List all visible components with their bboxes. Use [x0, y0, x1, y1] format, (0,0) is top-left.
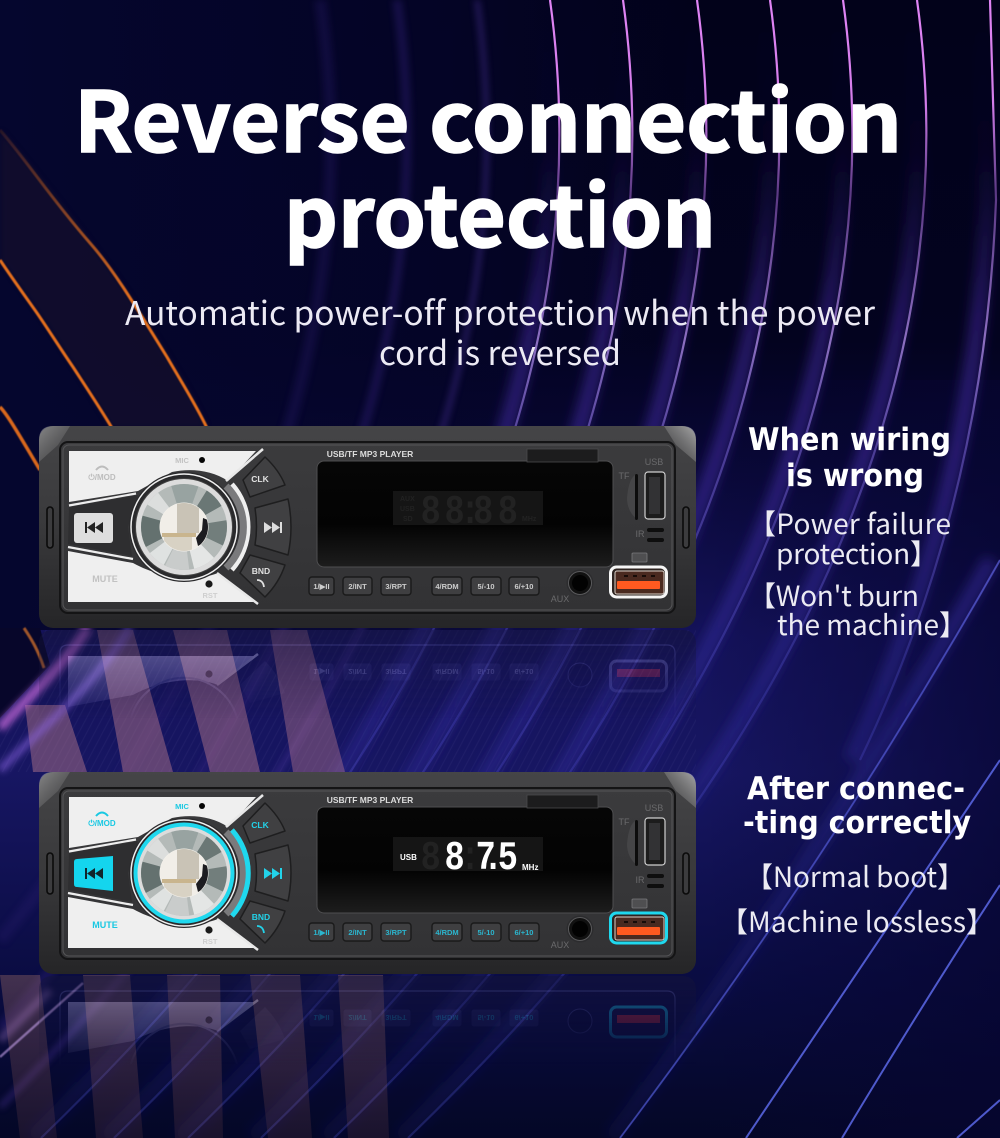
- preset buttons labels: [313, 582, 533, 591]
- panel labels: MUTE: [92, 574, 118, 584]
- label: after connecting correctly: [720, 771, 994, 941]
- reflection of radio, wrong wiring: 4/RDM: [435, 667, 459, 676]
- reflection of radio, correct wiring: 4/RDM: [435, 1013, 459, 1022]
- reflection of radio, correct wiring: 1/▶II: [313, 1013, 330, 1022]
- port labels: AUX: [551, 594, 569, 604]
- port labels: USB: [645, 803, 663, 813]
- subtitle: cord is reversed: [379, 327, 621, 375]
- panel labels lit: RST: [202, 937, 218, 946]
- blank LCD: 88:88: [421, 490, 518, 536]
- LCD reading 87.5 MHz: MHz: [522, 863, 538, 872]
- previous button: [74, 513, 113, 543]
- preset buttons labels: 2/INT: [348, 582, 367, 591]
- label: when wiring is wrong: is wrong: [786, 458, 924, 494]
- panel labels lit: MIC: [175, 802, 189, 811]
- preset buttons labels lit: 6/+10: [515, 928, 533, 937]
- cyan ring: [136, 824, 232, 922]
- next icon lit: [264, 868, 282, 879]
- reflection of radio, correct wiring: 3/RPT: [385, 1013, 407, 1022]
- reflection of radio, correct wiring: [39, 976, 696, 1054]
- car radio, correct wiring (lit): [39, 772, 696, 974]
- panel labels lit: ⏻/MOD: [88, 819, 116, 828]
- panel labels: CLK: [251, 474, 270, 484]
- USB port outline white: [610, 567, 666, 597]
- panel labels lit: MUTE: [92, 920, 118, 930]
- blank LCD: MHz: [522, 516, 537, 523]
- reflection of radio, wrong wiring: 3/RPT: [385, 667, 407, 676]
- label: when wiring is wrong: 【Power failure: [748, 503, 951, 543]
- preset buttons labels: 5/-10: [477, 582, 495, 591]
- reflection of radio, correct wiring: 5/-10: [477, 1013, 495, 1022]
- stripes below lower radio: [0, 975, 389, 1138]
- port labels: USB: [645, 457, 663, 467]
- title: [74, 56, 902, 272]
- car radio, wrong wiring (unlit): [39, 426, 696, 628]
- reflection of radio, wrong wiring: 5/-10: [477, 667, 495, 676]
- cyan arc: [232, 830, 248, 916]
- preset buttons labels: 1/▶II: [313, 582, 330, 591]
- reflection of radio, wrong wiring: [39, 630, 696, 708]
- pink stripes between radios: [0, 628, 345, 772]
- label: after connecting correctly: After connec-: [747, 771, 965, 807]
- port labels: IR: [636, 529, 645, 539]
- USB port outline cyan: [610, 913, 666, 943]
- previous button lit: [74, 856, 113, 891]
- reflection of radio, wrong wiring: 1/▶II: [313, 667, 330, 676]
- blank LCD: AUX: [400, 496, 415, 503]
- label: when wiring is wrong: the machine】: [777, 604, 967, 644]
- panel labels lit: CLK: [251, 820, 270, 830]
- port labels: [551, 803, 663, 950]
- preset buttons labels lit: 4/RDM: [435, 928, 459, 937]
- label: when wiring is wrong: protection】: [776, 533, 938, 573]
- preset buttons labels lit: 2/INT: [348, 928, 367, 937]
- reflection of radio, correct wiring: 6/+10: [515, 1013, 533, 1022]
- label: after connecting correctly: -ting correctly: [743, 805, 971, 841]
- reflection of radio, wrong wiring: 6/+10: [515, 667, 533, 676]
- preset buttons labels lit: [313, 928, 533, 937]
- label: after connecting correctly: 【Normal boot】: [745, 856, 965, 896]
- label: after connecting correctly: 【Machine lossless】: [720, 901, 994, 941]
- port labels: TF: [618, 817, 630, 827]
- preset buttons labels: 3/RPT: [385, 582, 407, 591]
- LCD reading 87.5 MHz: [400, 836, 538, 882]
- panel labels: ⏻/MOD: [88, 473, 116, 482]
- radio shell: [39, 426, 696, 628]
- port labels: IR: [636, 875, 645, 885]
- panel labels lit: [88, 795, 413, 946]
- port labels: TF: [618, 471, 630, 481]
- subtitle: [125, 287, 875, 375]
- title: Reverse connection: [74, 56, 902, 177]
- panel labels: RST: [202, 591, 218, 600]
- subtitle: Automatic power-off protection when the power: [125, 287, 875, 335]
- LCD reading 87.5 MHz: USB: [400, 853, 417, 862]
- panel labels: MIC: [175, 456, 189, 465]
- panel labels lit: BND: [252, 912, 270, 922]
- radio shell: [39, 772, 696, 974]
- preset buttons labels: 6/+10: [515, 582, 533, 591]
- blank LCD: USB: [400, 506, 415, 513]
- title: protection: [284, 151, 716, 272]
- preset buttons labels lit: 1/▶II: [313, 928, 330, 937]
- LCD reading 87.5 MHz: 87.5: [444, 836, 518, 882]
- orange arcs: [0, 130, 207, 668]
- reflection of radio, wrong wiring: 2/INT: [348, 667, 367, 676]
- preset buttons labels lit: 3/RPT: [385, 928, 407, 937]
- next icon: [264, 522, 282, 533]
- reflection of radio, correct wiring: 2/INT: [348, 1013, 367, 1022]
- panel labels: BND: [252, 566, 270, 576]
- label: when wiring is wrong: 【Won't burn: [748, 575, 919, 615]
- panel labels: USB/TF MP3 PLAYER: [327, 449, 413, 459]
- preset buttons labels lit: 5/-10: [477, 928, 495, 937]
- label: when wiring is wrong: [748, 422, 967, 644]
- port labels: [551, 457, 663, 604]
- preset buttons labels: 4/RDM: [435, 582, 459, 591]
- label: when wiring is wrong: When wiring: [748, 422, 951, 458]
- panel labels lit: USB/TF MP3 PLAYER: [327, 795, 413, 805]
- LCD reading 87.5 MHz: 8:: [421, 836, 480, 882]
- blank LCD: SD: [403, 516, 413, 523]
- panel labels: [88, 449, 413, 600]
- port labels: AUX: [551, 940, 569, 950]
